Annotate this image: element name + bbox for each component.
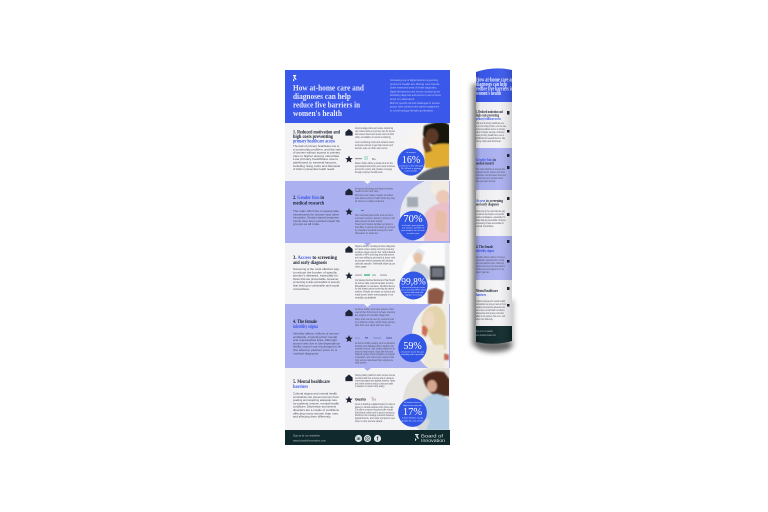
roll section 1 text: high costs preventing <box>476 114 499 118</box>
logo mark <box>293 75 297 82</box>
roll icons <box>507 111 510 306</box>
icon: star <box>345 208 353 215</box>
intro text: women's health are driving new trends. <box>390 82 440 86</box>
trend text: and point-of-care testing can bring screening <box>355 248 394 251</box>
newsletter links: www.boardofinnovation.com <box>293 438 326 442</box>
example text: and send results to women's phones, with <box>355 217 396 220</box>
roll section 5 text: seeking and acquiring adequate care <box>476 306 505 309</box>
stat bubble: 99,8%: of cervical cancer cases <box>402 286 426 289</box>
heading: infertility stigma <box>293 325 318 330</box>
roll section 5 text: affect them differently. <box>476 318 493 321</box>
roll section 1 text: The lack of primary healthcare use <box>476 122 504 125</box>
body text: for patients unsure, mental health <box>293 401 339 405</box>
example text <box>355 403 395 423</box>
trend text: read of their hormones in private, lowering <box>355 311 396 314</box>
rolled poster mockup <box>472 66 516 352</box>
body text: a community problem, and the rate <box>293 147 341 151</box>
notch <box>364 181 371 184</box>
trend text: At-home technology and data for female <box>355 188 394 190</box>
example text: ovarian reserve, with results shared in an <box>355 348 396 351</box>
body text: and reproductive lives. Although <box>293 338 337 342</box>
body text: Screening is the most effective way <box>293 267 340 271</box>
example text: that differ in women and often go missed <box>355 226 396 229</box>
panel: section 4 infertility <box>285 304 450 368</box>
example text: conception, and community support tools <box>355 356 395 359</box>
stat bubble: 16%: care provider <box>405 170 418 172</box>
photo: woman with laptop <box>400 368 450 430</box>
trend text: it easier to seek help early. <box>355 385 385 388</box>
roll section 3 text <box>476 199 506 228</box>
roll section 3 text: those that are preventable. However, <box>476 219 506 222</box>
body text: of women without access to primary <box>293 151 341 155</box>
trend text: Remote tests make it easier to collect <box>355 194 393 197</box>
roll section 5 text: Depression and anxiety disorders <box>476 312 505 315</box>
trend text: by a clinician online, which helps women <box>355 321 396 324</box>
stat bubble: 16%: 18–44 lack a primary <box>401 167 422 170</box>
trend text: samples in HPV screening show that women <box>355 254 394 257</box>
stat bubble: 70%: pain studies are on men <box>401 229 425 232</box>
heading: high costs preventing <box>293 135 334 140</box>
example text: iBreastExam is a wireless, handheld device <box>355 285 395 288</box>
stat bubble: 16%: of women in the US aged <box>399 164 424 168</box>
partner logos <box>355 274 387 276</box>
trend text: and online sessions reduce costs and make <box>355 382 393 385</box>
heading: 3. Access to screening <box>293 256 338 261</box>
stat bubble: 16% <box>397 148 425 176</box>
example text <box>355 214 396 235</box>
newsletter links <box>293 434 326 442</box>
panel: section 5 mental healthcare <box>285 368 450 430</box>
roll section 5 text: barriers <box>476 293 486 297</box>
partner logos <box>355 337 392 338</box>
roll section 4 text: and reproductive lives. Although <box>476 262 504 265</box>
example text: Gusto is building a digital therapy for women <box>355 403 395 406</box>
roll section 5 text: for unsure mental health conditions. <box>476 309 505 312</box>
icon: house <box>345 310 353 316</box>
roll section 1 text: is a community problem, and the rate <box>476 125 506 128</box>
heading: and early diagnosis <box>293 261 327 266</box>
body text: The main effort lies in appropriate <box>293 209 339 213</box>
icon: linkedin <box>355 435 362 442</box>
notch <box>364 304 371 307</box>
example text: Nurx and Everlywell offer tests at home <box>355 214 394 217</box>
title: women's health <box>293 109 342 118</box>
icon: star <box>345 335 353 342</box>
example text: At-home fertility testing such as Modern <box>355 342 396 345</box>
roll section 5 text: Cultural stigma and mental health <box>476 300 505 303</box>
panel: header <box>285 70 450 123</box>
icon: star <box>345 272 353 279</box>
trend text: who cannot travel and reduce costs of clinic <box>355 133 395 136</box>
roll section 2 text: medical research <box>476 162 494 166</box>
roll section 2 text: investments for women and other <box>476 171 505 174</box>
heading <box>293 380 331 390</box>
example text: Companies like Eve Medical and Teal Health <box>355 279 395 282</box>
trend text: data about women's health while they stay <box>355 197 396 200</box>
body text: worldwide, impacting their mental <box>293 335 337 339</box>
body text: seeking and acquiring adequate care <box>293 398 337 402</box>
icon: house <box>345 246 353 253</box>
photo: blonde woman <box>410 304 450 368</box>
roll section 5 text: constraints can prevent women from <box>476 303 506 306</box>
example text: data reports to their doctor. <box>355 220 383 223</box>
title: How at-home care and <box>293 84 364 92</box>
stat bubble: 70%: 70% <box>403 214 423 225</box>
roll title: How at-home care and <box>476 78 516 84</box>
roll section 4 text: worldwide, impacting their mental <box>476 259 504 262</box>
example text: reach women where mammography is not <box>355 294 393 296</box>
example text: easy-to-read report. Apps like Ava and <box>355 350 394 353</box>
trend text <box>355 308 396 327</box>
body text: medical diagnosis. <box>293 351 319 355</box>
icon: star <box>345 156 353 162</box>
roll section 1 text: Low primary healthcare use is <box>476 134 505 137</box>
trend text: Low monitoring costs and at-home tests <box>355 141 395 144</box>
roll section 4 text: infertility stigma <box>476 249 494 253</box>
intro text: groups, these solutions drive patient engagement <box>390 105 439 109</box>
body text: fertility, women are encouraged to be <box>293 345 341 349</box>
trend text: as accurate results compared with clinician <box>355 260 393 262</box>
roll section 5 text <box>476 289 506 321</box>
trend text: plan their next steps with less worry. <box>355 324 391 327</box>
trend text: empower women to get help sooner and <box>355 144 394 147</box>
body text: screening is also accessible in women <box>293 280 340 284</box>
intro text: Under-researched areas of female diagnostics, <box>390 86 437 90</box>
stat bubble: 70% <box>398 211 428 240</box>
stat bubble: 99,8% <box>400 272 428 300</box>
heading: medical research <box>293 202 324 206</box>
roll section 2 text: Gender bias in <box>476 158 496 162</box>
stat bubble: 16%: of women <box>406 152 417 154</box>
partner logos <box>355 156 376 161</box>
photo: mammogram <box>410 244 449 304</box>
roll section 1 text: attributed to several factors, like <box>476 137 505 140</box>
roll section 2 text: trends have been pushed toward <box>476 177 503 180</box>
body text: minorities. Gender-based treatment <box>293 216 339 220</box>
body text: disorders are a couple of conditions <box>293 408 340 412</box>
example text: gynecological and primary care needs of women <box>355 165 395 168</box>
body text: and affecting them differently. <box>293 415 331 419</box>
roll section 1 text: 1. Reduced motivation and <box>476 110 503 114</box>
roll section 2 text <box>476 158 506 183</box>
example text: Tia offers a women-focused care model <box>355 409 393 412</box>
trend text <box>355 245 396 268</box>
cylinder shading <box>476 66 512 348</box>
photo: woman in yellow top <box>416 123 449 180</box>
partner logos: Tia <box>371 398 376 402</box>
body text: Cultural stigma and mental health <box>293 392 337 396</box>
intro text: digital therapeutics and remote monitoring are <box>390 89 440 93</box>
body text <box>293 332 341 355</box>
stat bubble: 17%: in their lifetime, nearly <box>402 416 424 420</box>
stat bubble: 59%: 59% <box>403 341 422 352</box>
body text: groups at all risks. <box>293 222 320 226</box>
stat bubble: 17% <box>398 398 427 427</box>
body text: trends have been pushed toward the <box>293 219 340 223</box>
roll section 4 text: 4. The female <box>476 245 493 249</box>
icon: linkedin: in <box>357 436 361 441</box>
stat bubble: 99,8%: regular screening <box>405 294 423 296</box>
trend text: At-home diagnostics and remote monitoring <box>355 127 393 130</box>
trend text: removing stigma and logistic barriers. Apps <box>355 380 396 383</box>
roll section 3 text: screening is less accessible for <box>476 222 504 225</box>
roll section 5 text: affect more women than men, and <box>476 315 505 318</box>
stat bubble: 70%: or male mice <box>407 232 420 235</box>
example text: time in one secure place. <box>355 420 383 423</box>
body text: including rising costs and dismissal <box>293 164 340 168</box>
roll section 2 text: The main effort lies in appropriate <box>476 168 505 171</box>
panel: section 3 screening <box>285 243 450 304</box>
roll section 3 text: women's diseases, especially for <box>476 216 505 219</box>
example text: help women talk about their experience <box>355 359 394 362</box>
example text: across the country and provides coverage <box>355 168 392 171</box>
example text: Members can message providers between <box>355 414 395 417</box>
heading: 2. Gender bias in <box>293 196 324 201</box>
roll section 1 text: of women without access to primary <box>476 128 506 131</box>
trend text: collected samples. Telehealth follow-up can <box>355 262 395 265</box>
stat bubble: 99,8%: can be detected with <box>403 291 424 294</box>
icon: star <box>345 396 353 403</box>
example text: for fast breast cancer screening by trained <box>355 288 394 291</box>
panel: section 2 gender bias <box>285 180 452 243</box>
roll section 3 text: and early diagnosis <box>476 202 499 206</box>
body text: women's diseases, especially for <box>293 274 338 278</box>
example text: let women take cervical samples at home. <box>355 282 394 285</box>
body text <box>293 209 340 226</box>
roll section 1 text <box>476 110 506 143</box>
poster <box>285 70 452 445</box>
roll footer text <box>476 330 496 336</box>
trend text: close gaps. <box>355 265 367 268</box>
roll section 1 text: care is higher among minorities. <box>476 131 505 134</box>
example text: that blends online and in-person sessions. <box>355 411 395 414</box>
body text: affecting many women than men, <box>293 411 339 415</box>
roll title <box>476 77 512 95</box>
body text: constraints can prevent women from <box>293 395 340 399</box>
panel: section 1 primary healthcare access <box>285 122 450 181</box>
trend text: At-home fertility tests give women a first <box>355 308 394 311</box>
trend text: are more willing to get tested at home, with <box>355 257 396 260</box>
heading <box>293 256 338 266</box>
icon: house <box>345 374 353 381</box>
intro text: Built for specific clinical challenges in women <box>390 101 440 105</box>
example text: with peers. <box>355 362 367 365</box>
roll section 1 text: primary healthcare access <box>476 117 501 121</box>
roll shadow <box>472 84 514 352</box>
intro text: facilitating diagnosis and access to care at home <box>390 93 441 97</box>
roll title: diagnoses can help <box>476 82 507 88</box>
stat bubble: 59% <box>398 334 427 362</box>
body text: minorities. <box>293 287 310 291</box>
icon: facebook <box>374 435 381 443</box>
roll section 1 text: rising costs and dismissal. <box>476 140 501 143</box>
trend text: mental health care at home and on demand, <box>355 377 394 380</box>
partner logos: Bu <box>372 157 376 161</box>
roll section 4 text <box>476 245 505 274</box>
heading: 4. The female <box>293 320 318 325</box>
example text: based on clinical evidence from group care. <box>355 406 394 409</box>
trend text: access care on their own terms. <box>355 147 388 150</box>
roll section 3 text: social minorities. <box>476 225 494 228</box>
partner logos <box>355 208 364 212</box>
roll section 3 text: Access to screening <box>476 199 503 203</box>
example text: Heart tech tracks cardiac symptoms <box>355 223 394 226</box>
body text: those that are preventable. However, <box>293 277 339 281</box>
roll section 3 text: to reduce the burden of specific <box>476 213 505 216</box>
newsletter links: Sign up for our newsletter <box>293 434 320 438</box>
roll section 4 text: fertility are encouraged to be the <box>476 268 504 271</box>
body text: conditions. Depression and anxiety <box>293 405 337 409</box>
roll section 4 text: Infertility affects millions of women <box>476 256 505 259</box>
footer <box>285 430 450 445</box>
example text: disease in women. <box>355 232 379 235</box>
trend text: Telepsychiatry platforms offer women remote <box>355 374 395 377</box>
body text <box>293 392 340 419</box>
notch <box>364 368 371 371</box>
icon: house <box>345 188 353 195</box>
roll title: reduce five barriers in <box>476 86 513 92</box>
stat bubble: 59%: infertility with a provider <box>401 353 424 356</box>
body text: attributed to several factors, <box>293 160 337 164</box>
example text: workers. Results are shown on a phone and <box>355 291 395 294</box>
example text: Fertility and Natalist offer insights into <box>355 345 395 348</box>
example text <box>355 162 395 174</box>
partner logos: Gusto <box>355 398 367 402</box>
body text: to reduce the burden of specific <box>293 270 338 274</box>
example text: through employer benefit plans. <box>355 171 383 174</box>
trend text: Daytime clinics, including at-home diagnosis <box>355 245 396 248</box>
heading <box>293 320 318 330</box>
body text: Infertility affects millions of women <box>293 332 339 336</box>
heading: 5. Mental healthcare <box>293 380 331 385</box>
stat bubble: 70%: are women, yet 80% of <box>402 227 425 230</box>
logo: Board of Innovation: Board of <box>421 434 444 438</box>
trend text: at home in daily routines. <box>355 200 385 203</box>
example text <box>355 342 396 365</box>
body text: women who live in low-dependence <box>293 341 340 345</box>
partner logos <box>355 398 376 402</box>
trend text: can reduce barriers to primary care for women <box>355 130 395 133</box>
roll footer text: Sign up for our newsletter <box>476 329 493 333</box>
example text: by standard medical testing for heart <box>355 229 393 232</box>
stat bubble: 99,8%: are caused by HPV, which <box>401 288 427 292</box>
roll section 3 text: Screening is the most effective way <box>476 210 506 213</box>
stat bubble: 70%: of chronic pain patients <box>402 224 425 227</box>
body text: Low primary healthcare use is <box>293 157 339 161</box>
example text: appointments, and track symptoms over <box>355 417 395 420</box>
roll section 4 text: silent partner. <box>476 271 490 274</box>
example text: Natural Cycles track ovulation to support <box>355 353 395 356</box>
title: diagnoses can help <box>293 92 351 101</box>
intro text: and on demand. <box>390 97 415 101</box>
body text <box>293 267 340 291</box>
roll title: women's health <box>476 91 501 97</box>
notch <box>364 243 371 246</box>
stat bubble: 17%: depressive episode <box>403 404 423 407</box>
trend text <box>355 127 395 150</box>
body text: investments for women and other <box>293 212 339 216</box>
trend text: the stigma of a fertility diagnosis. <box>355 314 390 317</box>
example text: readily available. <box>355 296 377 299</box>
icon: facebook: f <box>377 437 379 443</box>
intro text: Increasing use of digital devices supporting <box>390 78 438 82</box>
body text: that belong to vulnerable and social <box>293 284 339 288</box>
title: reduce five barriers in <box>293 100 360 110</box>
logo: Board of Innovation: Innovation <box>421 438 446 443</box>
stat bubble: 17%: of women have a <box>404 402 422 404</box>
body text <box>293 144 341 171</box>
stat bubble: 99,8%: 99,8% <box>401 278 426 288</box>
heading <box>293 196 324 206</box>
intro text <box>390 78 441 112</box>
roll footer text: www.boardofinnovation.com <box>476 333 496 337</box>
heading: barriers <box>293 385 308 390</box>
roll section 2 text: the groups at risk. <box>476 180 496 183</box>
trend text <box>355 188 396 203</box>
icon: instagram <box>364 435 371 442</box>
stat bubble: 17%: double the rate of men <box>402 419 424 422</box>
logo: Board of Innovation <box>415 434 446 443</box>
body text: the silence partner prior to a <box>293 348 337 352</box>
trend text <box>355 374 396 388</box>
trend text: to places where women live. Self-collected <box>355 251 396 254</box>
roll body <box>476 68 512 344</box>
intro text: in a technology-literate generation. <box>390 108 434 112</box>
body text: of trials in preventive health needs. <box>293 167 335 171</box>
trend text: Many tests can be sent by mail and read <box>355 318 395 321</box>
photo: elderly woman <box>400 181 449 241</box>
heading <box>293 130 340 145</box>
body text: The lack of primary healthcare use is <box>293 144 340 148</box>
roll section 5 text: Mental healthcare <box>476 289 498 293</box>
stat bubble: 59%: of women never discuss <box>401 350 425 354</box>
roll section 2 text: minorities. Gender-based treatment <box>476 174 506 177</box>
roll section 4 text: women who live in low-dependence <box>476 265 505 268</box>
icon: house <box>345 129 353 136</box>
stat bubble: 16%: 16% <box>402 155 420 166</box>
heading: primary healthcare access <box>293 140 335 145</box>
body text: care is higher among minorities. <box>293 154 340 158</box>
heading: 1. Reduced motivation and <box>293 130 340 136</box>
trend text: visits, consultation or remote monitoring. <box>355 136 391 139</box>
example text <box>355 279 395 299</box>
trend text: health is the next step. <box>355 190 379 193</box>
example text: Maven Clinic offers a virtual clinic for the <box>355 162 394 165</box>
stat bubble: 17%: 17% <box>403 407 422 418</box>
